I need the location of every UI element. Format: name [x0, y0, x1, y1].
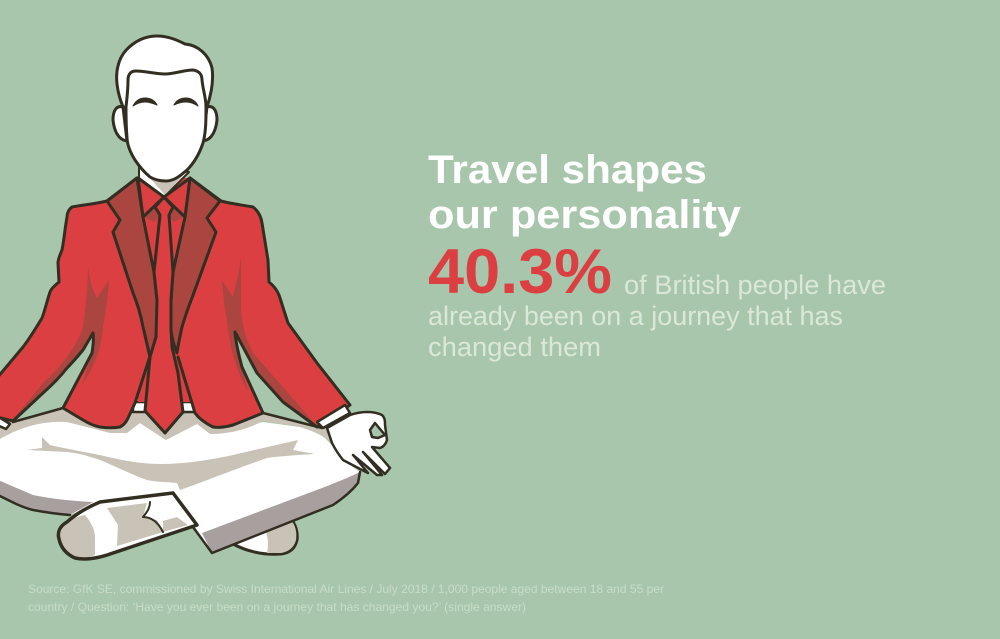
hand [327, 412, 390, 475]
front shoe [58, 493, 197, 559]
statistic description: changed them [428, 332, 601, 362]
right leg underside [202, 472, 360, 553]
left ear [113, 107, 127, 141]
trousers crease [27, 437, 315, 490]
shirt front [137, 178, 190, 402]
left eyebrow [133, 98, 157, 106]
statistic description: of British people have [624, 270, 886, 300]
jacket left side [0, 178, 157, 428]
right sleeve shadow [222, 257, 317, 426]
shirt collar [138, 178, 190, 217]
left shirt cuff [0, 416, 10, 429]
left leg underside [0, 480, 93, 515]
white trousers [0, 396, 360, 553]
jacket right side [171, 178, 350, 427]
headline: Travel shapes [428, 148, 707, 192]
neck [139, 166, 189, 197]
left sleeve shadow [13, 265, 109, 421]
right jacket outline [178, 178, 350, 427]
right ear [203, 107, 217, 141]
illustration: meditating man in red suit [0, 36, 390, 559]
source note: Source: GfK SE, commissioned by Swiss International Air Lines / July 2018 / 1,000 people aged between 18 and 55 per [28, 582, 664, 596]
shirt hem [133, 402, 197, 412]
back shoe [226, 518, 297, 554]
headline: our personality [428, 193, 742, 237]
hair [117, 36, 213, 107]
right lapel [171, 178, 220, 353]
statistic description: already been on a journey that has [428, 301, 843, 331]
face [126, 70, 206, 181]
left jacket outline [0, 178, 152, 428]
right eyebrow [174, 98, 198, 106]
source note: country / Question: ‘Have you ever been on a journey that has changed you?’ (single answer) [28, 600, 526, 614]
left lapel [107, 178, 157, 357]
trousers under-jacket shadow [0, 396, 330, 440]
right shirt cuff [317, 405, 350, 428]
necktie [145, 197, 183, 433]
big statistic: 40.3%: 40.3% [428, 237, 612, 307]
